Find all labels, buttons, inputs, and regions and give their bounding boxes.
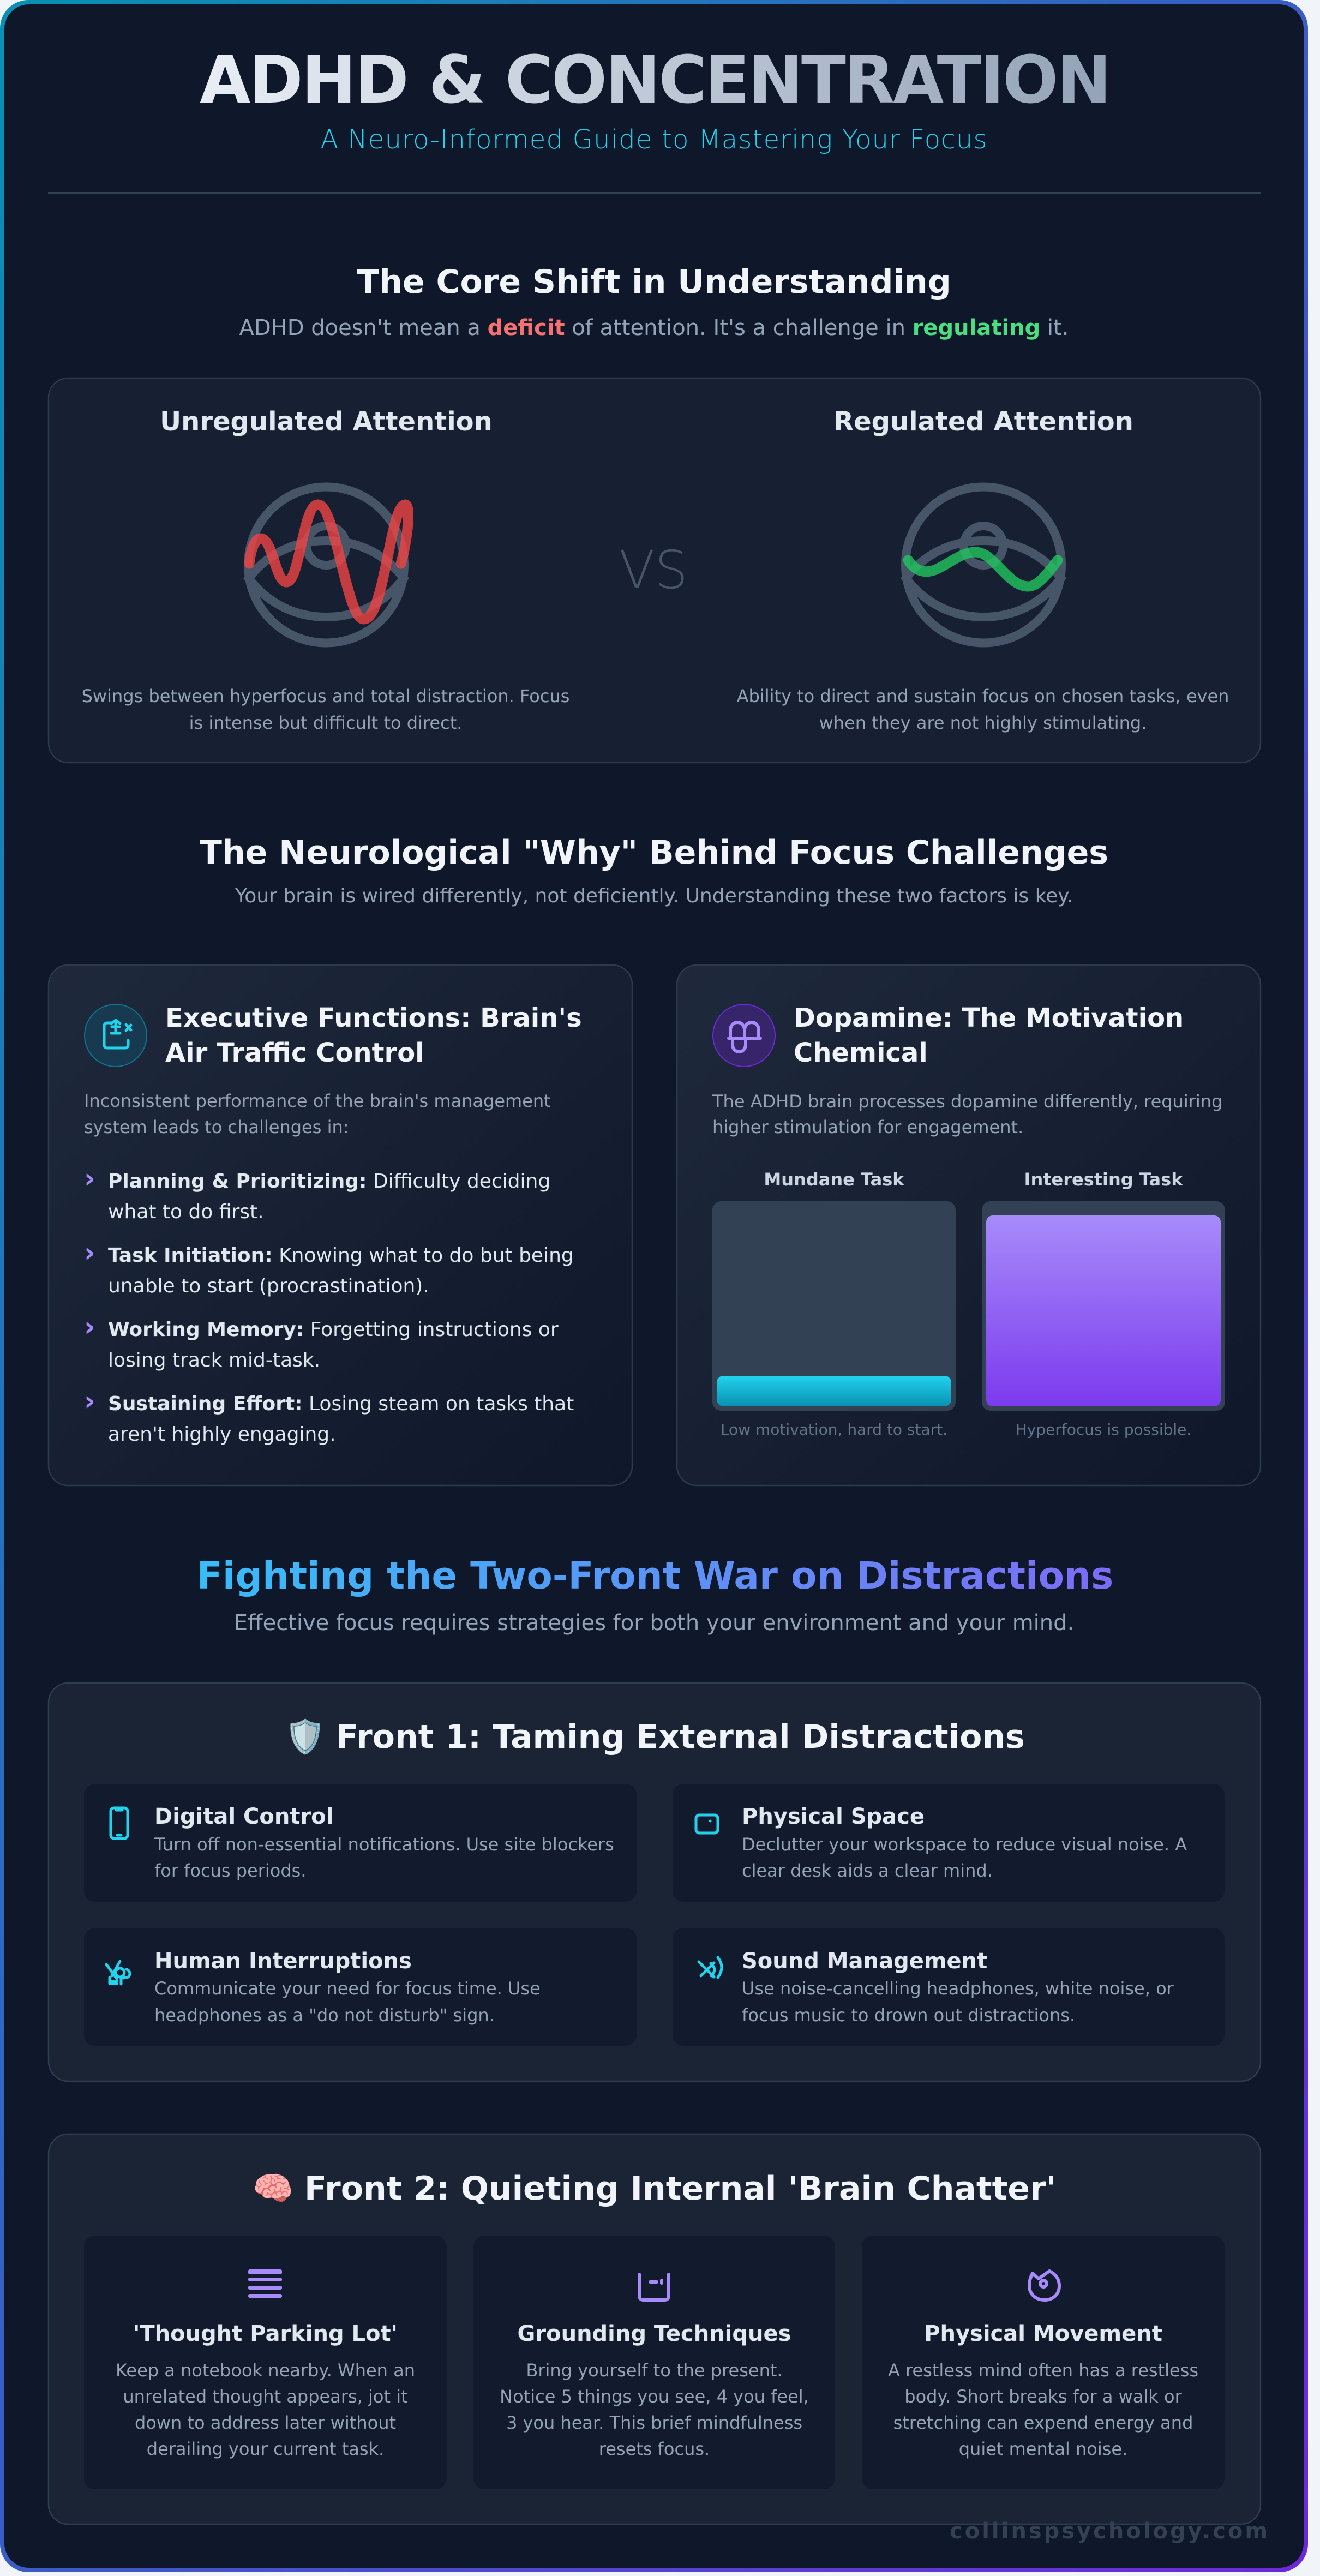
- icon: air traffic control: [85, 1004, 147, 1067]
- card: grounding techniques: Notice 5 things you see, 4 you feel,: [500, 2386, 809, 2407]
- card: digital control: Turn off non-essential notifications. Use site blockers: [154, 1834, 614, 1855]
- icon: grounding tray: [639, 2274, 669, 2300]
- list: executive challenges: [84, 1163, 574, 1446]
- list: executive challenges: ›: [84, 1385, 95, 1417]
- text: regulated description: Ability to direct and sustain focus on chosen tasks, even: [737, 686, 1229, 706]
- icon: regulated eye with steady wave: [905, 487, 1061, 643]
- text: executive intro: [84, 1091, 551, 1137]
- text: regulated description: when they are not highly stimulating.: [819, 712, 1147, 733]
- card: sound management: focus music to drown out distractions.: [742, 2005, 1075, 2026]
- icon: movement spiral: [1029, 2271, 1059, 2300]
- card: thought parking lot: down to address later without: [135, 2412, 396, 2433]
- card: physical movement: A restless mind often has a restless: [888, 2360, 1198, 2381]
- panel: attention comparison: [49, 378, 1261, 763]
- list: executive challenges: aren't highly engaging.: [108, 1423, 336, 1446]
- section heading: two-front war: Fighting the Two-Front War on Distractions: [197, 1554, 1113, 1598]
- icon: dopamine molecule: [713, 1004, 775, 1067]
- text: unregulated description: is intense but difficult to direct.: [189, 712, 462, 733]
- icon: phone: [111, 1808, 128, 1838]
- panel: front 1 external distractions: [49, 1683, 1261, 2081]
- card: thought parking lot: 'Thought Parking Lot': [133, 2321, 398, 2346]
- text: dopamine intro: [712, 1091, 1222, 1137]
- card: physical movement: quiet mental noise.: [959, 2439, 1127, 2459]
- chart: interesting task bar: [982, 1169, 1225, 1439]
- card: sound management: Sound Management: [742, 1949, 987, 1974]
- card: digital control: [84, 1784, 637, 1902]
- text: unregulated description: [82, 686, 569, 733]
- card: digital control: Digital Control: [154, 1804, 333, 1829]
- card: physical movement: Physical Movement: [924, 2321, 1162, 2346]
- section intro: core shift: ADHD doesn't mean a deficit of attention. It's a challenge in regulating it.: [239, 315, 1069, 340]
- heading: dopamine: [794, 1003, 1184, 1068]
- card: digital control: for focus periods.: [154, 1860, 307, 1881]
- heading: front 2: Front 2: Quieting Internal 'Brain Chatter': [304, 2170, 1056, 2208]
- card: sound management: [673, 1928, 1225, 2046]
- list: executive challenges: Sustaining Effort: Losing steam on tasks that: [108, 1393, 574, 1415]
- icon: desk square: [696, 1815, 718, 1833]
- chart: mundane task bar: Mundane Task: [764, 1169, 904, 1190]
- heading: dopamine: Dopamine: The Motivation: [794, 1003, 1184, 1033]
- icon: person interrupted: [106, 1961, 130, 1984]
- card: sound management: Use noise-cancelling headphones, white noise, or: [742, 1978, 1174, 1999]
- card: grounding techniques: resets focus.: [599, 2439, 710, 2459]
- heading: front 1: Front 1: Taming External Distractions: [336, 1718, 1025, 1756]
- icon: muted sound: [699, 1957, 722, 1978]
- text: executive intro: Inconsistent performance of the brain's management: [84, 1091, 551, 1111]
- chart: interesting task bar: Interesting Task: [1024, 1169, 1183, 1190]
- card: thought parking lot: unrelated thought appears, jot it: [123, 2386, 408, 2407]
- watermark: collinspsychology.com: [950, 2519, 1270, 2544]
- text: dopamine intro: higher stimulation for engagement.: [712, 1117, 1023, 1137]
- card: grounding techniques: Bring yourself to the present.: [526, 2360, 783, 2381]
- card: thought parking lot: Keep a notebook nearby. When an: [116, 2360, 415, 2381]
- list: executive challenges: what to do first.: [108, 1201, 264, 1223]
- panel: front 2 internal chatter: [49, 2134, 1261, 2524]
- section heading: neurological why: The Neurological "Why" Behind Focus Challenges: [200, 834, 1108, 872]
- list: executive challenges: Planning & Prioritizing: Difficulty deciding: [108, 1170, 550, 1193]
- card: grounding techniques: 3 you hear. This brief mindfulness: [506, 2412, 802, 2433]
- section heading: core shift: The Core Shift in Understanding: [357, 263, 951, 301]
- chart: interesting task bar: Hyperfocus is possible.: [1016, 1421, 1191, 1439]
- subtitle: A Neuro-Informed Guide to Mastering Your Focus: [320, 124, 988, 155]
- section intro: two-front war: Effective focus requires strategies for both your environment and your mind.: [234, 1610, 1074, 1636]
- card: physical movement: body. Short breaks for a walk or: [904, 2386, 1183, 2407]
- list: executive challenges: ›: [84, 1237, 95, 1268]
- heading: front 2: 🧠: [253, 2169, 293, 2208]
- card: thought parking lot: [84, 2236, 447, 2489]
- list: executive challenges: losing track mid-task.: [108, 1349, 320, 1371]
- card: grounding techniques: [473, 2236, 835, 2489]
- title: ADHD & CONCENTRATION: [200, 43, 1110, 118]
- text: executive intro: system leads to challenges in:: [84, 1117, 349, 1137]
- card: human interruptions: Human Interruptions: [154, 1949, 412, 1974]
- list: executive challenges: ›: [84, 1311, 95, 1343]
- section intro: neurological why: Your brain is wired differently, not deficiently. Understanding these two factors is key.: [235, 885, 1073, 907]
- panel: dopamine: [677, 965, 1261, 1485]
- list: executive challenges: ›: [84, 1163, 95, 1194]
- card: thought parking lot: derailing your current task.: [147, 2439, 384, 2459]
- chart: mundane task bar: Low motivation, hard to start.: [721, 1421, 947, 1439]
- card: physical space: clear desk aids a clear mind.: [742, 1860, 993, 1881]
- card: physical space: Declutter your workspace to reduce visual noise. A: [742, 1834, 1187, 1855]
- card: physical space: [673, 1784, 1225, 1902]
- card: grounding techniques: Grounding Techniques: [518, 2321, 791, 2346]
- list: executive challenges: unable to start (procrastination).: [108, 1275, 429, 1297]
- label: VS: VS: [619, 540, 688, 601]
- card: human interruptions: [84, 1928, 637, 2046]
- heading: unregulated attention: Unregulated Attention: [160, 406, 493, 437]
- list: executive challenges: Working Memory: Forgetting instructions or: [108, 1319, 559, 1341]
- card: physical movement: [862, 2236, 1225, 2489]
- panel: executive functions: [49, 965, 632, 1485]
- heading: executive functions: [165, 1003, 582, 1068]
- icon: list lines: [248, 2269, 282, 2298]
- card: physical movement: stretching can expend energy and: [893, 2412, 1193, 2433]
- icon: unregulated eye with erratic wave: [248, 487, 408, 643]
- card: human interruptions: Communicate your need for focus time. Use: [154, 1978, 541, 1999]
- heading: executive functions: Air Traffic Control: [165, 1038, 424, 1068]
- chart: mundane task bar: [712, 1169, 956, 1439]
- heading: front 1: 🛡️: [285, 1717, 326, 1756]
- heading: executive functions: Executive Functions: Brain's: [165, 1003, 582, 1033]
- card: human interruptions: headphones as a "do not disturb" sign.: [154, 2005, 495, 2026]
- list: executive challenges: Task Initiation: Knowing what to do but being: [108, 1244, 574, 1267]
- text: unregulated description: Swings between hyperfocus and total distraction. Focus: [82, 686, 569, 706]
- text: regulated description: [737, 686, 1229, 733]
- text: dopamine intro: The ADHD brain processes dopamine differently, requiring: [712, 1091, 1222, 1112]
- heading: dopamine: Chemical: [794, 1038, 928, 1068]
- heading: regulated attention: Regulated Attention: [833, 406, 1133, 437]
- card: physical space: Physical Space: [742, 1804, 925, 1829]
